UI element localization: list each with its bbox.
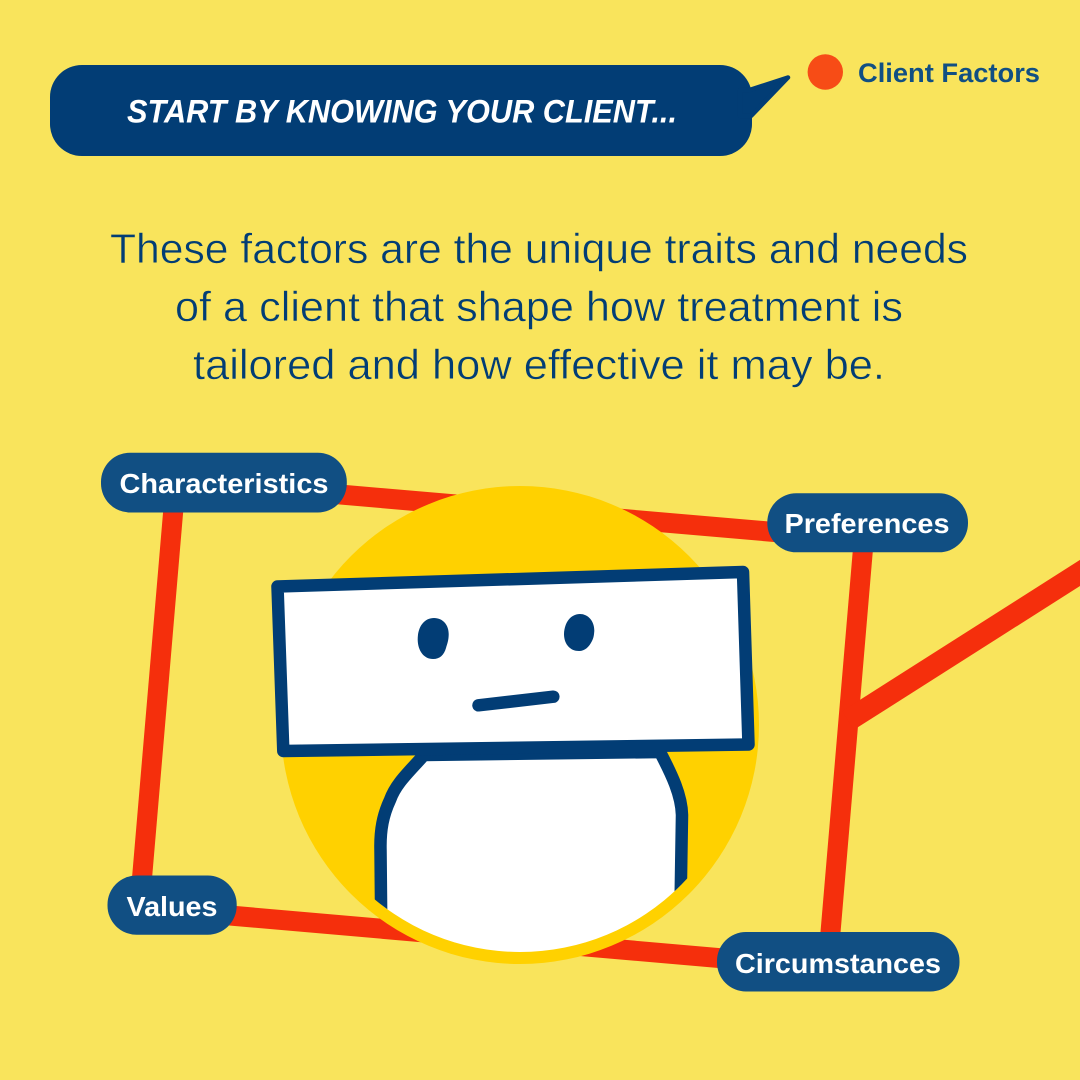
intro text: of a client that shape how treatment is — [175, 283, 903, 330]
label: values: Values — [126, 891, 218, 922]
label: preferences: Preferences — [784, 508, 950, 539]
label: circumstances: Circumstances — [735, 948, 941, 979]
label: characteristics — [101, 453, 347, 512]
character illustration — [278, 486, 759, 1000]
label: characteristics: Characteristics — [120, 468, 328, 499]
yellow circle background — [281, 486, 759, 964]
label: values — [108, 876, 237, 935]
red connector lines — [141, 484, 1080, 968]
legend: client factors — [808, 54, 1040, 90]
label: preferences — [767, 493, 968, 552]
intro text: These factors are the unique traits and needs — [110, 225, 968, 272]
intro text: tailored and how effective it may be. — [193, 341, 885, 388]
right eye — [564, 614, 594, 651]
speech bubble banner: START BY KNOWING YOUR CLIENT... — [127, 94, 677, 130]
legend: client factors: Client Factors — [858, 58, 1040, 88]
intro text — [110, 225, 968, 388]
speech bubble banner — [50, 65, 788, 156]
head box — [278, 572, 748, 751]
label: circumstances — [717, 932, 960, 992]
left eye — [418, 618, 449, 659]
mouth — [478, 697, 553, 705]
body — [374, 752, 688, 952]
